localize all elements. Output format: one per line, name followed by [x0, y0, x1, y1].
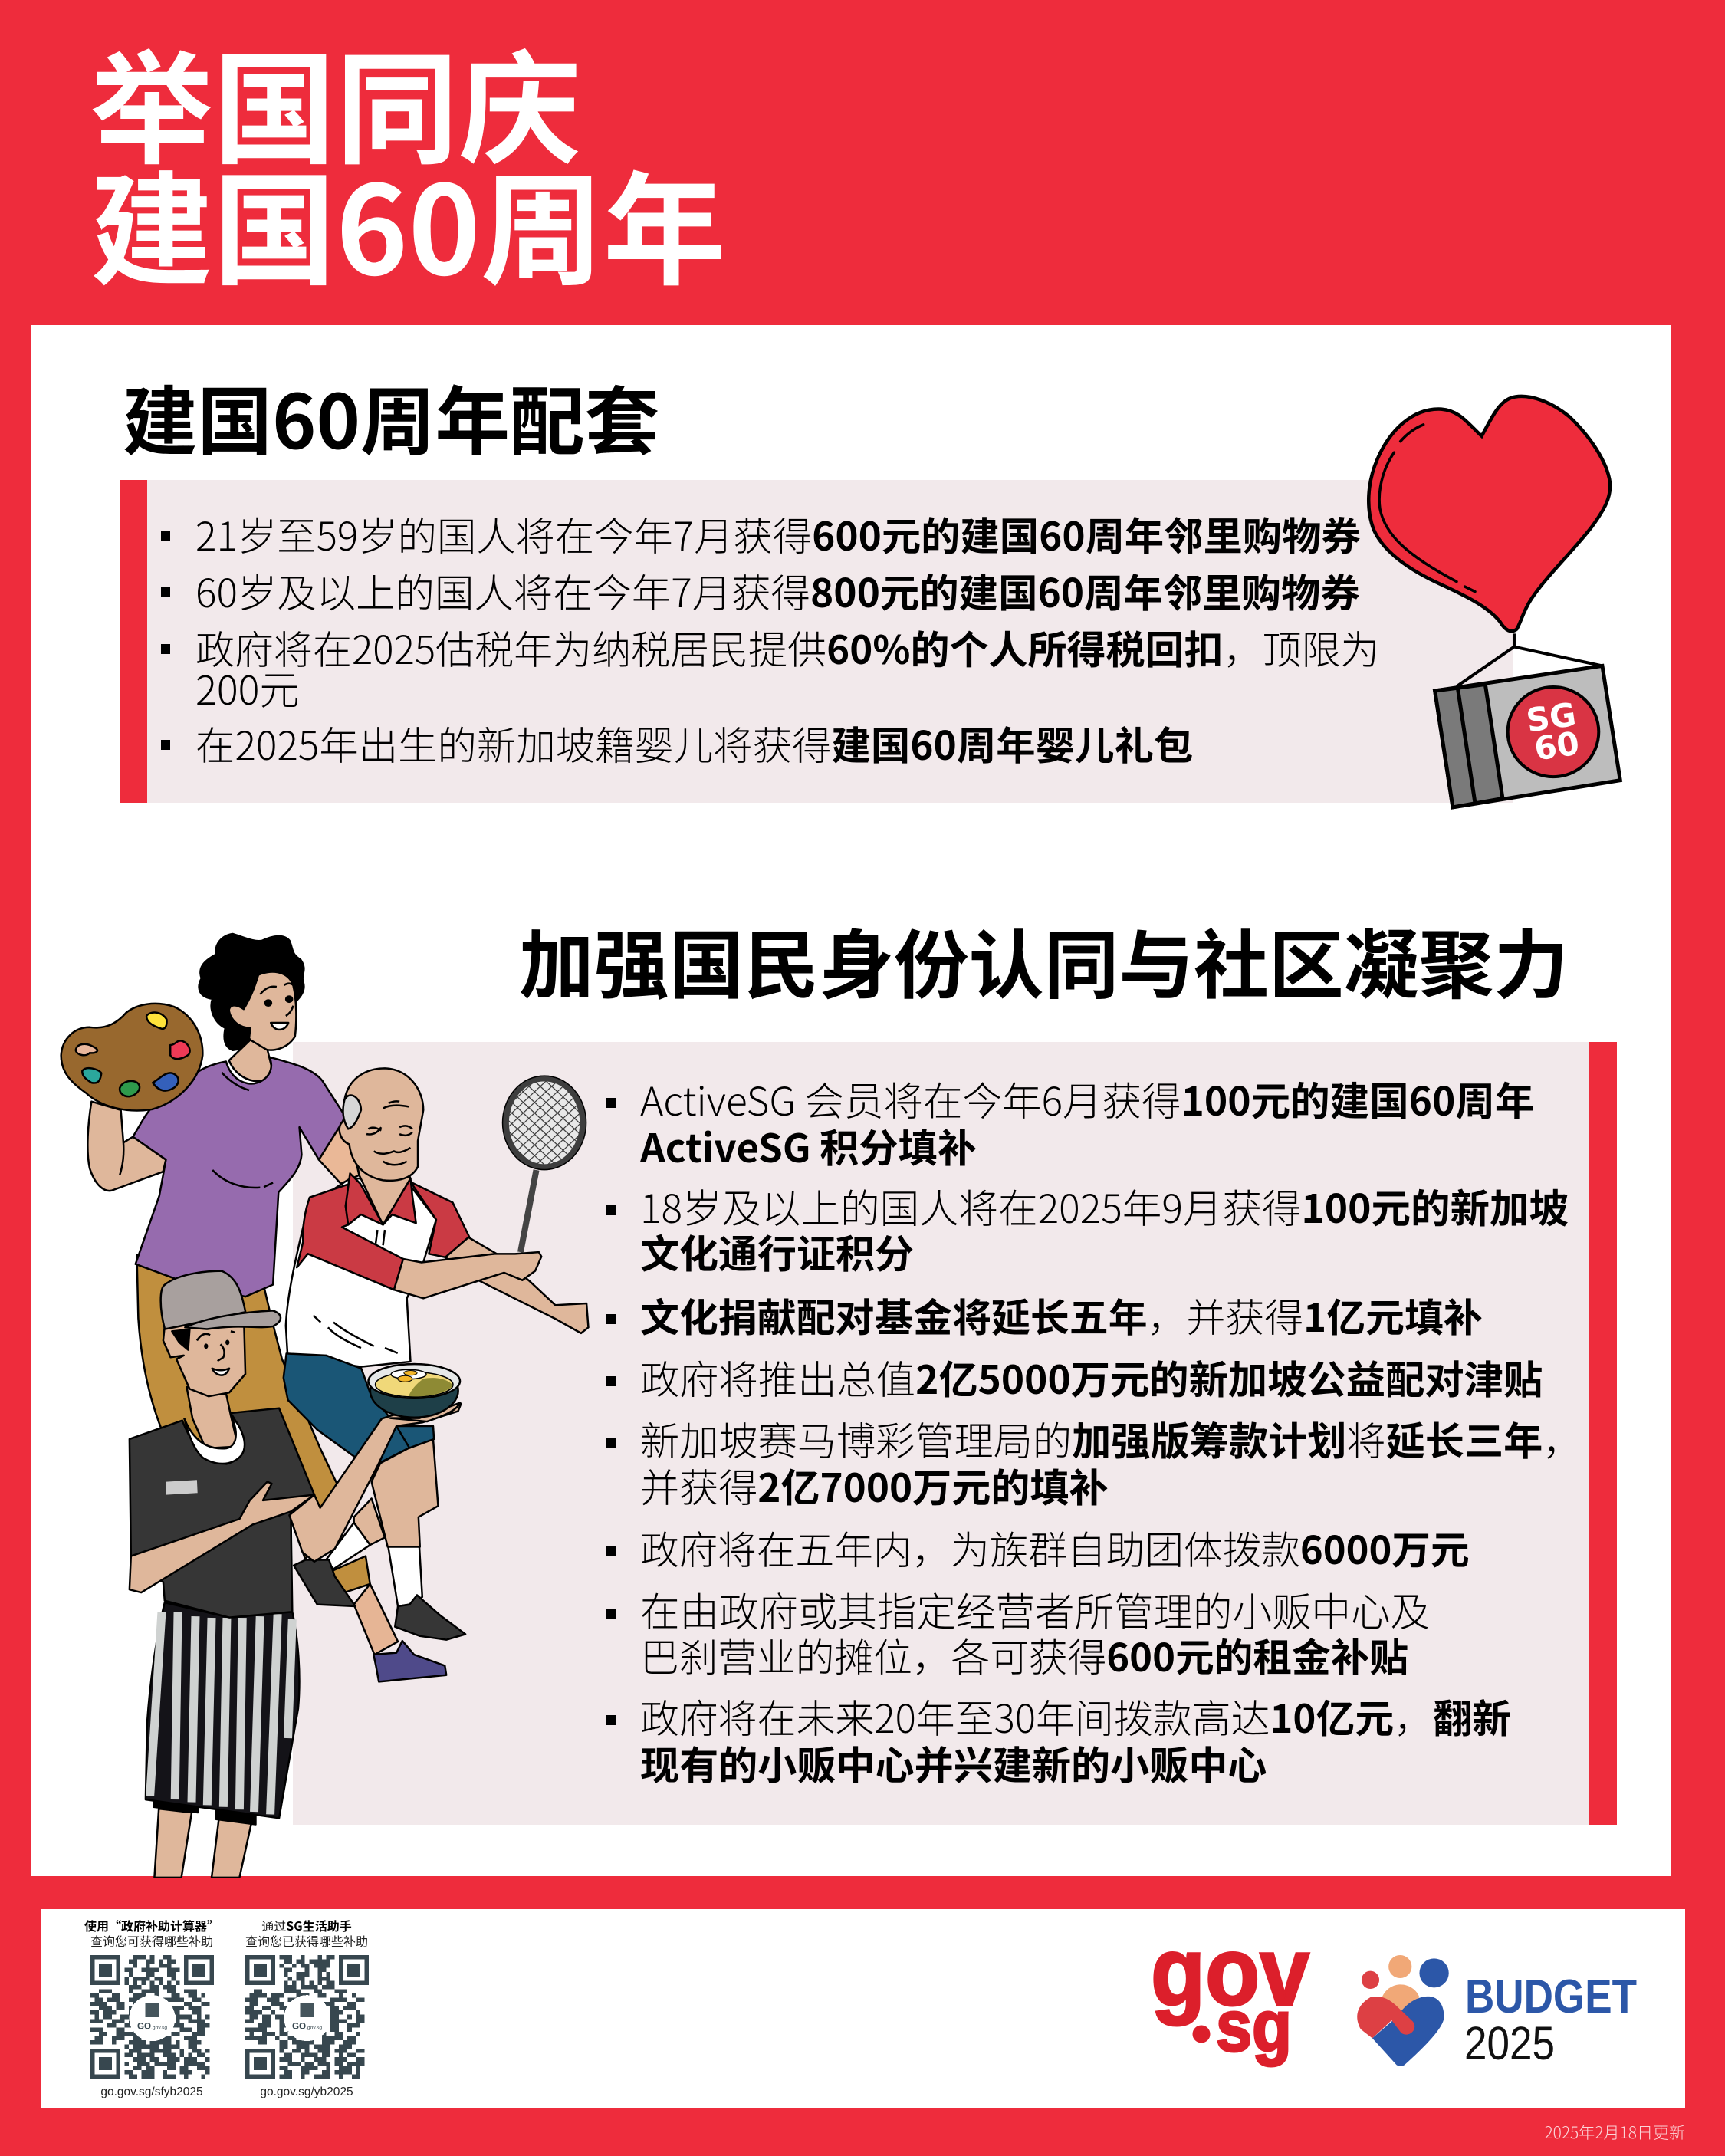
QR block: subsidy calculator: go.gov.sg/sfyb2025: [100, 2085, 203, 2098]
QR code: GO.gov.sg: [292, 2022, 322, 2032]
bullet 2: [606, 1177, 1569, 1280]
heart emblem: [1357, 1955, 1449, 2066]
panel: SG60 package list: [120, 480, 1513, 803]
bullet 2: 文化通行证积分: [640, 1223, 914, 1280]
bullet 5: 并获得2亿7000万元的填补: [640, 1457, 1109, 1513]
bullet 3: 政府将在2025估税年为纳税居民提供60%的个人所得税回扣，顶限为: [196, 619, 1379, 675]
QR block: subsidy calculator: 使用“政府补助计算器”: [84, 1916, 219, 1934]
heading: national identity and community cohesion: 加强国民身份认同与社区凝聚力: [519, 906, 1569, 1014]
bullet 1: 21岁至59岁的国人将在今年7月获得600元的建国60周年邻里购物券: [196, 504, 1361, 562]
bullet 2: 60岁及以上的国人将在今年7月获得800元的建国60周年邻里购物券: [196, 561, 1360, 619]
bullet 3: 文化捐献配对基金将延长五年，并获得1亿元填补: [640, 1287, 1483, 1343]
bullet 1: [606, 1070, 1534, 1174]
QR code: [245, 1955, 369, 2079]
logo: gov.sg: [1151, 1940, 1311, 2067]
heading: SG60 package: 建国60周年配套: [123, 363, 659, 471]
QR block: LifeSG: 查询您已获得哪些补助: [245, 1931, 368, 1950]
QR code: [90, 1955, 214, 2079]
bullet 8: 现有的小贩中心并兴建新的小贩中心: [640, 1734, 1267, 1791]
QR block: LifeSG: [245, 1916, 369, 2098]
red accent bar: [120, 480, 147, 803]
icon: heart balloon carrying SG60 gift box: SG: [1524, 695, 1579, 739]
QR block: LifeSG: 通过SG生活助手: [261, 1916, 352, 1934]
bullet 8: 政府将在未来20年至30年间拨款高达10亿元，翻新: [640, 1688, 1511, 1744]
artist woman: [61, 934, 360, 1297]
bullet 5: [606, 1410, 1582, 1513]
QR code: GO.gov.sg: [137, 2022, 167, 2032]
bullet 7: 巴刹营业的摊位，各可获得600元的租金补贴: [640, 1626, 1408, 1683]
bullet 3: 200元: [196, 659, 299, 716]
QR block: subsidy calculator: 查询您可获得哪些补助: [90, 1931, 213, 1950]
elderly man with badminton racket: [286, 1068, 588, 1367]
hawker man: [130, 1271, 461, 1878]
bullet 2: 18岁及以上的国人将在2025年9月获得100元的新加坡: [640, 1177, 1569, 1234]
icon: heart balloon carrying SG60 gift box: [1366, 394, 1622, 810]
bullet 6: 政府将在五年内，为族群自助团体拨款6000万元: [640, 1519, 1470, 1576]
bullet 4: 政府将推出总值2亿5000万元的新加坡公益配对津贴: [640, 1348, 1543, 1405]
panel: main white background: [31, 325, 1671, 1876]
bullet 7: 在由政府或其指定经营者所管理的小贩中心及: [640, 1580, 1430, 1638]
panel: footer: [41, 1909, 1685, 2108]
red accent bar: [1589, 1042, 1617, 1825]
bullet 8: [606, 1688, 1511, 1791]
illustration: artist, elderly badminton player and hawker: [60, 932, 590, 1878]
logo: Budget 2025: 2025: [1464, 2017, 1555, 2069]
bullet 1: ActiveSG 会员将在今年6月获得100元的建国60周年: [640, 1070, 1534, 1127]
bullet 4: 在2025年出生的新加坡籍婴儿将获得建国60周年婴儿礼包: [196, 714, 1193, 771]
bullet 1: ActiveSG 积分填补: [640, 1117, 977, 1174]
bullet 7: [606, 1580, 1430, 1683]
man's shorts and legs: [284, 1353, 465, 1640]
logo: Budget 2025: [1357, 1955, 1637, 2069]
title: 举国同庆: [90, 12, 581, 189]
woman's trousers and lower leg: [136, 1255, 446, 1681]
panel: identity and community list: [293, 1042, 1617, 1825]
title: [90, 12, 726, 311]
QR block: LifeSG: go.gov.sg/yb2025: [260, 2085, 353, 2098]
title: 建国60周年: [90, 133, 726, 311]
bullet 5: 新加坡赛马博彩管理局的加强版筹款计划将延长三年，: [640, 1410, 1582, 1467]
QR block: subsidy calculator: [84, 1916, 219, 2098]
update date: 2025年2月18日更新: [1544, 2121, 1685, 2144]
logo: gov.sg: sg: [1216, 1986, 1292, 2067]
bullet 3: [161, 619, 1379, 716]
icon: heart balloon carrying SG60 gift box: 60: [1532, 725, 1582, 767]
